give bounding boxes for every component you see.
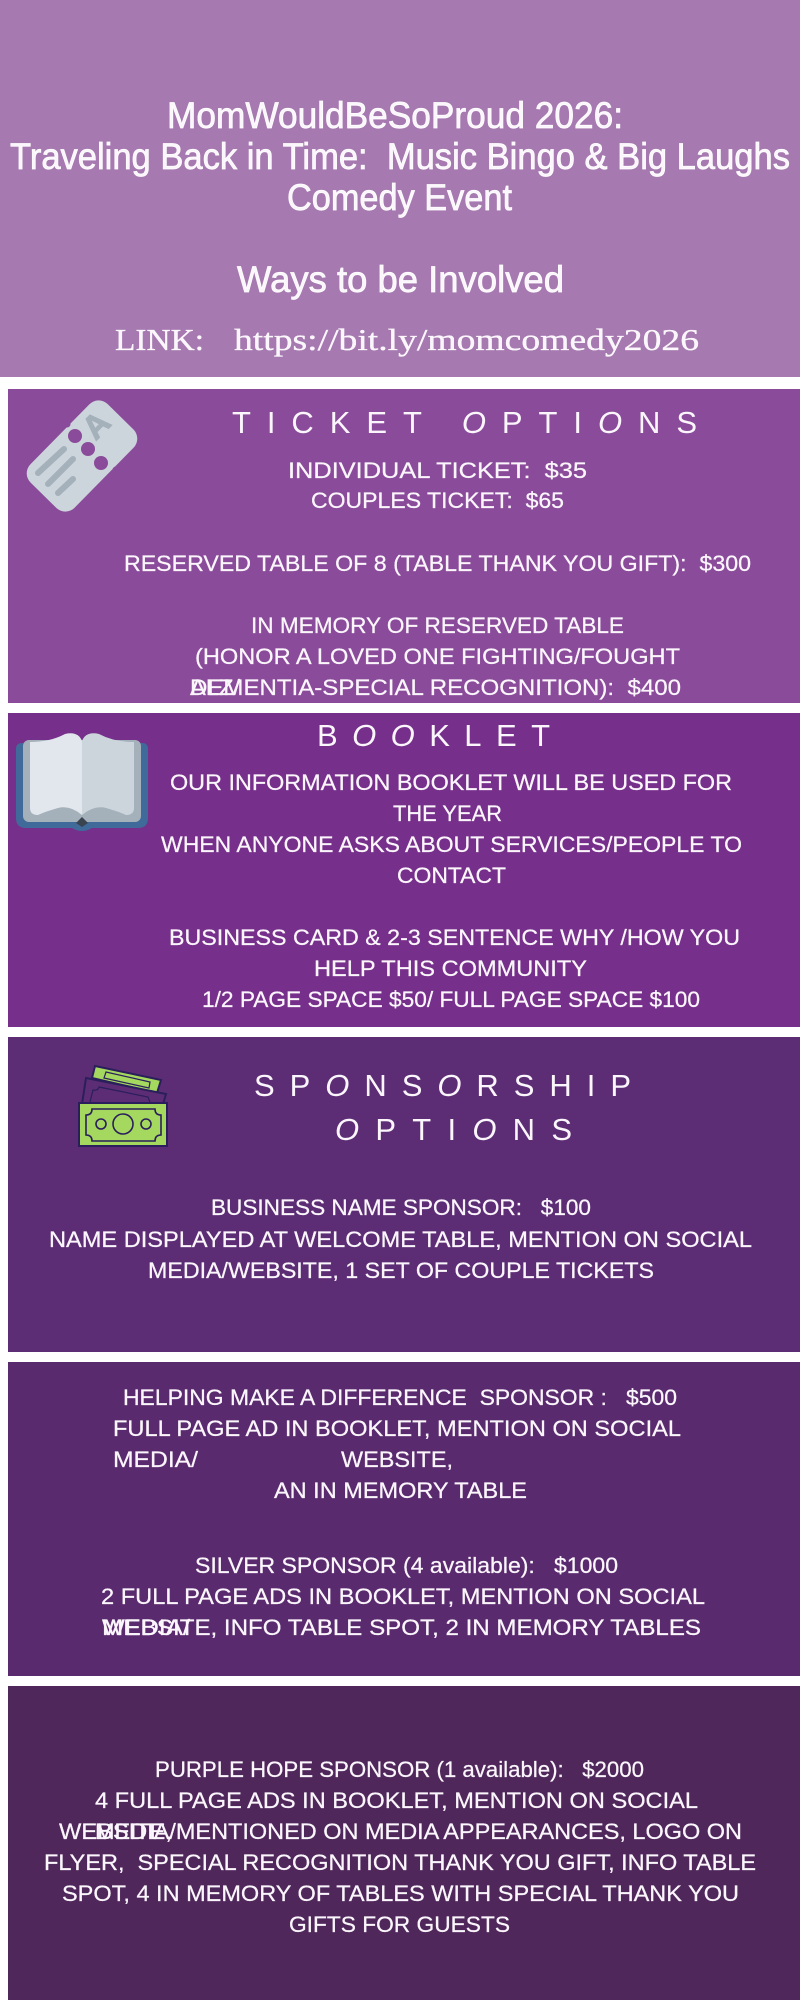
- purple hope sponsor text: PURPLE HOPE SPONSOR (1 available): $2000: [155, 1757, 644, 1782]
- purple hope sponsor text: 4 FULL PAGE ADS IN BOOKLET, MENTION ON SOCIAL: [95, 1788, 698, 1813]
- icon: ticket: A: [74, 403, 117, 446]
- heading: booklet: B OO KLET: [317, 718, 550, 753]
- helping make a difference sponsor text: AN IN MEMORY TABLE: [274, 1478, 527, 1503]
- helping make a difference sponsor text: MEDIA/: [113, 1447, 199, 1472]
- booklet description text: WHEN ANYONE ASKS ABOUT SERVICES/PEOPLE TO: [161, 832, 742, 857]
- booklet description text: 1/2 PAGE SPACE $50/ FULL PAGE SPACE $100: [202, 987, 700, 1012]
- panel: booklet: [8, 713, 800, 1027]
- ticket prices text: IN MEMORY OF RESERVED TABLE: [251, 613, 624, 638]
- business name sponsor text: NAME DISPLAYED AT WELCOME TABLE, MENTION ON SOCIAL: [49, 1227, 752, 1252]
- ticket prices text: ALZ/: [190, 675, 241, 700]
- link line: https://bit.ly/momcomedy2026: [234, 322, 699, 357]
- panel: ticket options: [8, 389, 800, 703]
- business name sponsor text: BUSINESS NAME SPONSOR: $100: [211, 1195, 591, 1220]
- booklet description text: HELP THIS COMMUNITY: [314, 956, 587, 981]
- booklet description text: [161, 770, 742, 1012]
- heading: sponsorship options: O PTI O NS: [335, 1112, 572, 1147]
- purple hope sponsor text: GIFTS FOR GUESTS: [289, 1912, 510, 1937]
- helping make a difference sponsor text: WEBSITE,: [341, 1447, 453, 1472]
- silver sponsor text: [101, 1553, 705, 1640]
- ticket prices text: INDIVIDUAL TICKET: $35: [288, 458, 587, 483]
- ticket prices text: (HONOR A LOVED ONE FIGHTING/FOUGHT: [195, 644, 680, 669]
- silver sponsor text: WEBSITE, INFO TABLE SPOT, 2 IN MEMORY TABLES: [102, 1615, 701, 1640]
- ticket prices text: DEMENTIA-SPECIAL RECOGNITION): $400: [190, 675, 681, 700]
- booklet description text: THE YEAR: [393, 801, 502, 826]
- panel: sponsorship options: [8, 1037, 800, 1352]
- title: Comedy Event: [287, 177, 513, 218]
- purple hope sponsor text: WEBSITE,: [59, 1819, 172, 1844]
- icon: ticket: [21, 395, 143, 517]
- ticket prices text: [124, 458, 751, 700]
- heading: sponsorship options: SP O NS O RSHIP: [254, 1068, 631, 1103]
- helping make a difference sponsor text: HELPING MAKE A DIFFERENCE SPONSOR : $500: [123, 1385, 677, 1410]
- heading: sponsorship options: [254, 1068, 631, 1147]
- purple hope sponsor text: FLYER, SPECIAL RECOGNITION THANK YOU GIFT, INFO TABLE: [44, 1850, 756, 1875]
- heading: ticket options: TICKET O PTI O NS: [232, 405, 697, 440]
- link line: LINK:: [115, 322, 204, 357]
- panel: purple hope sponsor: [8, 1686, 800, 2000]
- helping make a difference sponsor text: [113, 1385, 681, 1503]
- panel: difference and silver sponsors: [8, 1362, 800, 1676]
- ticket prices text: COUPLES TICKET: $65: [311, 488, 564, 513]
- icon: money: [79, 1066, 167, 1146]
- title: MomWouldBeSoProud 2026:: [167, 95, 623, 136]
- purple hope sponsor text: MEDIA/MENTIONED ON MEDIA APPEARANCES, LOGO ON: [95, 1819, 742, 1844]
- ticket prices text: RESERVED TABLE OF 8 (TABLE THANK YOU GIFT): $300: [124, 551, 751, 576]
- business name sponsor text: MEDIA/WEBSITE, 1 SET OF COUPLE TICKETS: [148, 1258, 654, 1283]
- booklet description text: CONTACT: [397, 863, 506, 888]
- purple hope sponsor text: [44, 1757, 756, 1937]
- booklet description text: OUR INFORMATION BOOKLET WILL BE USED FOR: [170, 770, 732, 795]
- booklet description text: BUSINESS CARD & 2-3 SENTENCE WHY /HOW YOU: [169, 925, 740, 950]
- icon: open book: [16, 733, 148, 831]
- panel: header: [0, 0, 800, 377]
- silver sponsor text: 2 FULL PAGE ADS IN BOOKLET, MENTION ON SOCIAL: [101, 1584, 705, 1609]
- business name sponsor text: [49, 1195, 752, 1283]
- subtitle: ways to be involved: Ways to be Involved: [237, 259, 564, 300]
- helping make a difference sponsor text: FULL PAGE AD IN BOOKLET, MENTION ON SOCIAL: [113, 1416, 681, 1441]
- link line: [115, 322, 699, 357]
- purple hope sponsor text: SPOT, 4 IN MEMORY OF TABLES WITH SPECIAL THANK YOU: [62, 1881, 739, 1906]
- silver sponsor text: MEDIA/: [102, 1615, 191, 1640]
- title: [10, 95, 790, 218]
- silver sponsor text: SILVER SPONSOR (4 available): $1000: [195, 1553, 618, 1578]
